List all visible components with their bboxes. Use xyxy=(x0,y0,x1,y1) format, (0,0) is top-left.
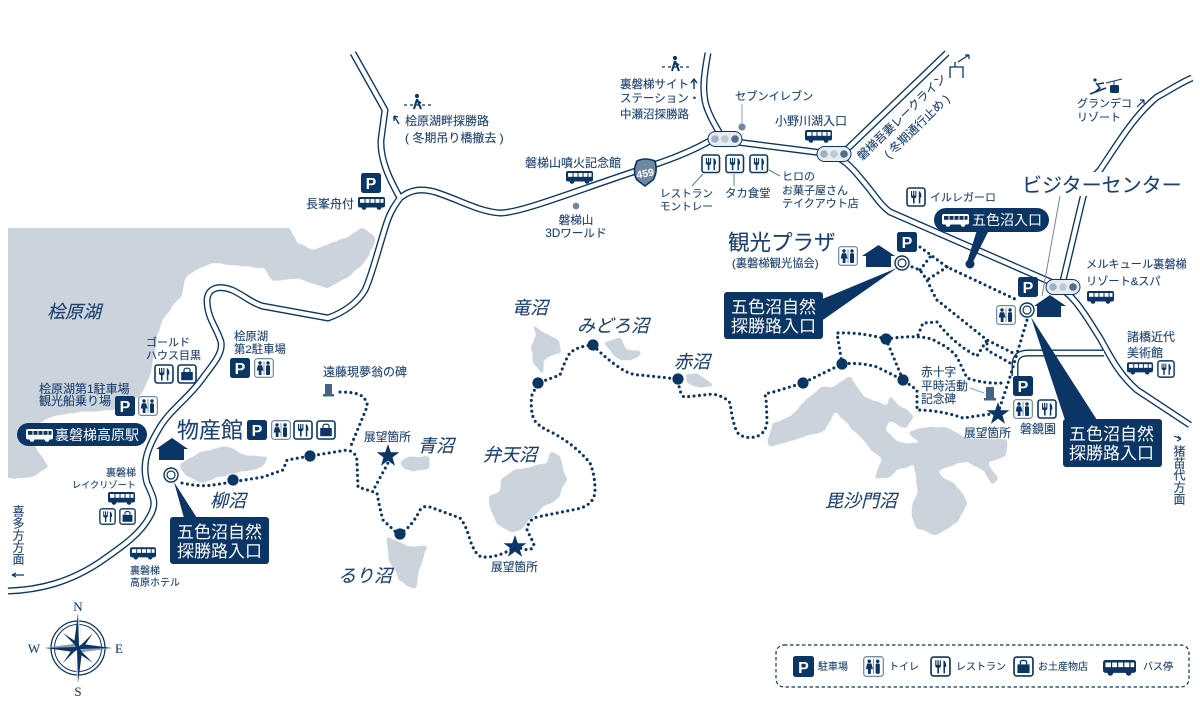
text: 裏磐梯高原ホテル: 裏磐梯 xyxy=(130,566,160,577)
arrow: 喜多方方面 xyxy=(12,573,24,577)
callout: ビジターセンター 五色沼自然探勝路入口 xyxy=(1031,317,1162,467)
text: 冬期通行止め: ( 冬期通行止め ) xyxy=(881,92,952,161)
viewpoint star: 弁天沼 xyxy=(504,535,526,557)
parking: 磐鏡園: P xyxy=(1018,379,1029,396)
compass rose: W xyxy=(28,641,41,656)
text: 裏磐梯レイクリゾート: レイクリゾート xyxy=(72,480,136,490)
title: ビジターセンター: ビジターセンター xyxy=(1022,174,1182,197)
arrow: グランデコ xyxy=(1137,100,1144,107)
icon: observation xyxy=(950,55,969,78)
restaurant: 磐鏡園 xyxy=(1038,400,1056,418)
poi dot: 磐梯山3Dワールド xyxy=(573,203,579,209)
lake: 弁天沼 xyxy=(489,451,567,533)
text: 裏磐梯高原ホテル: 高原ホテル xyxy=(130,576,180,589)
trail entrance: ビジターセンター xyxy=(1020,303,1034,317)
legend text: トイレ: トイレ xyxy=(889,662,919,673)
text: 磐鏡園: 磐鏡園 xyxy=(1020,422,1056,436)
viewpoint star: 毘沙門沼 xyxy=(987,402,1009,424)
bus: レイクリゾート xyxy=(108,492,135,505)
text: 磐梯山3Dワールド: 磐梯山 xyxy=(559,214,593,227)
compass rose xyxy=(28,599,123,699)
parking: 長峯舟付: P xyxy=(366,176,377,193)
text: 磐梯山3Dワールド: 3Dワールド xyxy=(545,227,607,240)
text: 展望箇所 弁天沼: 展望箇所 xyxy=(491,560,538,574)
lake: 竜沼 xyxy=(531,322,561,375)
lake: 赤沼 xyxy=(686,374,715,388)
bus: 小野川湖入口 xyxy=(805,130,832,143)
text: グランデコリゾート: リゾート xyxy=(1077,111,1121,124)
lake: 桧原湖 xyxy=(0,215,376,478)
dotted walking trails xyxy=(182,247,1027,557)
parking: ビジターセンター: P xyxy=(1023,280,1034,297)
bus: 長峯舟付 xyxy=(358,197,385,210)
label: 青沼: 青沼 xyxy=(418,436,457,456)
restaurant: モントレー xyxy=(702,155,720,173)
compass rose: N xyxy=(73,599,83,614)
callout: 観光プラザ 五色沼自然探勝路入口: 探勝路入口 xyxy=(731,317,816,336)
pill: 裏磐梯高原駅 xyxy=(17,423,147,446)
text: ゴールドハウス目黒: ゴールド xyxy=(146,337,190,349)
mask: straight map edges of 桧原湖 xyxy=(0,0,290,600)
text: メルキュール裏磐梯: リゾート&スパ xyxy=(1086,275,1161,288)
building: 物産館 xyxy=(156,438,188,460)
legend: bus xyxy=(1103,660,1136,676)
arrow: up xyxy=(691,79,697,89)
text: 赤十字平時活動記念碑: 記念碑 xyxy=(921,393,956,406)
title: 物産館: 物産館 xyxy=(177,418,243,443)
signal: east xyxy=(1046,280,1080,294)
text: 桧原湖畔探勝路: ( 冬期吊り橋撤去 ) xyxy=(405,130,504,145)
label: 竜沼: 竜沼 xyxy=(512,298,551,318)
arrow: 猪苗代方面 xyxy=(1174,436,1181,441)
bus: 諸橋近代美術館 xyxy=(1127,362,1153,375)
parking: 観光プラザ xyxy=(897,232,917,252)
text: 裏磐梯レイクリゾート: 裏磐梯 xyxy=(106,468,136,479)
text: 猪苗代方面: 猪苗代方面 xyxy=(1172,445,1186,505)
bus: メルキュール xyxy=(1087,291,1114,304)
text: 長峯舟付: 長峯舟付 xyxy=(306,197,354,211)
legend: parking: P xyxy=(798,660,809,677)
label: るり沼: るり沼 xyxy=(338,566,395,586)
toilet: 第2駐車場 xyxy=(255,359,273,377)
toilet: 物産館 xyxy=(272,421,290,439)
toilet: 磐鏡園 xyxy=(1014,400,1032,418)
text: 小野川湖入口: 小野川湖入口 xyxy=(775,113,847,128)
text: タカ食堂: タカ食堂 xyxy=(725,187,771,200)
restaurant: ヒロのお菓子屋さん xyxy=(750,155,768,173)
text: 裏磐梯サイトステーション: ステーション・ xyxy=(620,93,700,105)
text: 展望箇所 毘沙門沼: 展望箇所 xyxy=(964,426,1011,440)
legend text: レストラン: レストラン xyxy=(956,661,1006,673)
bus: 噴火記念館 xyxy=(566,171,593,184)
walker icon: 桧原湖畔探勝路 xyxy=(404,94,431,109)
lake: 毘沙門沼 xyxy=(767,376,1008,536)
legend text: バス停: バス停 xyxy=(1143,660,1173,673)
trail entrance: 観光プラザ xyxy=(895,256,909,270)
restaurant: 物産館 xyxy=(294,421,312,439)
parking: 磐鏡園 xyxy=(1013,376,1033,396)
text: 諸橋近代美術館: 諸橋近代 xyxy=(1127,330,1175,344)
text: 磐梯山噴火記念館: 磐梯山噴火記念館 xyxy=(525,156,621,170)
text: グランデコリゾート: グランデコ xyxy=(1077,98,1132,110)
legend panel xyxy=(776,645,1189,687)
legend text: お土産物店: お土産物店 xyxy=(1038,660,1088,673)
text: 遠藤現夢翁の碑: 遠藤現夢翁の碑 xyxy=(323,364,407,379)
lakes xyxy=(0,215,1008,590)
text: レストランモントレー: レストラン xyxy=(660,188,713,200)
text: 赤十字平時活動記念碑: 赤十字 xyxy=(921,366,956,379)
callout: 物産館 五色沼自然探勝路入口: 五色沼自然 xyxy=(177,523,262,542)
text: メルキュール裏磐梯: メルキュール裏磐梯 xyxy=(1086,259,1187,271)
text: 桧原湖第2駐車場: 桧原湖 xyxy=(234,331,268,343)
restaurant: ゴールドハウス xyxy=(155,365,173,383)
road network xyxy=(8,53,1192,591)
bus: 高原ホテル xyxy=(130,547,156,560)
trail entrance: 物産館 xyxy=(164,468,178,482)
text: ヒロのお菓子屋さん: お菓子屋さん xyxy=(782,184,848,197)
shop: ゴールドハウス xyxy=(178,365,196,383)
parking: 物産館 xyxy=(247,420,267,440)
building: 観光プラザ xyxy=(862,245,895,267)
text: 喜多方方面: 喜多方方面 xyxy=(11,505,25,565)
walker icon: 中瀬沼探勝路 xyxy=(662,56,689,71)
callout: 五色沼入口: 五色沼入口 xyxy=(972,212,1042,228)
leader line: ビジターセンター xyxy=(1042,196,1060,296)
parking: 第2駐車場: P xyxy=(235,361,246,378)
text: 磐梯吾妻レークライン: 磐梯吾妻レークライン xyxy=(854,71,949,163)
parking: 観光プラザ: P xyxy=(902,235,913,252)
text: セブンイレブン: セブンイレブン xyxy=(735,89,813,103)
text: レストランモントレー: モントレー xyxy=(660,201,713,213)
title: 観光プラザ: 観光プラザ xyxy=(728,231,836,255)
callout: 物産館 五色沼自然探勝路入口 xyxy=(170,482,269,564)
trail markers xyxy=(227,260,974,540)
text: 諸橋近代美術館: 美術館 xyxy=(1127,345,1163,360)
text: ヒロのお菓子屋さん: テイクアウト店 xyxy=(782,197,859,210)
icon: ski and gondola xyxy=(1090,78,1122,94)
legend: toilet xyxy=(864,657,883,676)
label: 柳沼: 柳沼 xyxy=(210,491,249,511)
callout: 観光プラザ 五色沼自然探勝路入口 xyxy=(724,268,897,339)
text: 赤十字平時活動記念碑: 平時活動 xyxy=(921,379,968,393)
lake: 柳沼 xyxy=(179,446,268,483)
legend: shop xyxy=(1014,657,1033,676)
lake: みどろ沼 xyxy=(604,338,642,361)
text: 桧原湖畔探勝路: 桧原湖畔探勝路 xyxy=(405,114,489,128)
text: 桧原湖第1駐車場: 桧原湖第1駐車場 xyxy=(39,382,130,396)
route shield 459 xyxy=(634,159,656,186)
monument: 遠藤現夢翁 xyxy=(323,384,334,396)
callout: ビジターセンター 五色沼自然探勝路入口: 五色沼自然 xyxy=(1069,425,1154,444)
viewpoint star: 青沼 xyxy=(377,444,399,466)
legend: parking xyxy=(793,656,814,677)
arrow: 桧原湖畔探勝路 xyxy=(394,116,399,124)
text: ヒロのお菓子屋さん: ヒロの xyxy=(782,171,815,183)
signal: center xyxy=(817,146,851,162)
toilet: 第1駐車場 xyxy=(139,397,157,415)
compass rose: E xyxy=(115,641,123,656)
label: 赤沼: 赤沼 xyxy=(674,352,713,372)
parking: 第1駐車場: P xyxy=(120,399,131,416)
text: 裏磐梯観光協会: (裏磐梯観光協会) xyxy=(732,256,819,270)
lake: るり沼 xyxy=(386,536,428,590)
restaurant: イルレガーロ xyxy=(907,188,925,206)
legend text: 駐車場: 駐車場 xyxy=(818,660,848,673)
label: 毘沙門沼: 毘沙門沼 xyxy=(825,491,900,511)
label: みどろ沼: みどろ沼 xyxy=(577,316,652,336)
shop: レイクリゾート xyxy=(120,509,135,524)
text: ゴールドハウス目黒: ハウス目黒 xyxy=(146,349,201,362)
text: 裏磐梯サイトステーション: 裏磐梯サイト xyxy=(620,79,689,91)
building: ビジターセンター xyxy=(1034,295,1066,317)
label: 桧原湖: 桧原湖 xyxy=(47,302,104,322)
monument: 赤十字 xyxy=(970,387,996,400)
parking: 第2駐車場 xyxy=(230,358,250,378)
text: 展望箇所 青沼: 展望箇所 xyxy=(364,430,411,444)
restaurant: 諸橋近代美術館 xyxy=(1158,361,1174,377)
text: 桧原湖第1駐車場: 観光船乗り場 xyxy=(39,394,111,408)
signal: west xyxy=(708,132,742,146)
callout: 五色沼入口 xyxy=(934,208,1049,264)
compass rose: S xyxy=(74,684,82,699)
legend: restaurant xyxy=(931,657,950,676)
parking: 長峯舟付 xyxy=(361,173,381,193)
restaurant: レイクリゾート xyxy=(100,509,115,524)
callout: 物産館 五色沼自然探勝路入口: 探勝路入口 xyxy=(177,542,262,561)
route shield 459: 459 xyxy=(635,167,655,181)
text: イルレガーロ: イルレガーロ xyxy=(930,191,996,204)
poi dot: セブンイレブン xyxy=(738,104,746,131)
shop: 物産館 xyxy=(317,421,335,439)
callout: ビジターセンター 五色沼自然探勝路入口: 探勝路入口 xyxy=(1069,444,1154,463)
leader lines xyxy=(692,170,780,186)
restaurant: タカ食堂 xyxy=(726,155,744,173)
text: 桧原湖第2駐車場: 第2駐車場 xyxy=(234,342,286,356)
toilet: 観光プラザ xyxy=(839,247,857,265)
pill: 裏磐梯高原駅: 裏磐梯高原駅 xyxy=(55,427,139,443)
lake: 青沼 xyxy=(399,456,429,472)
toilet: ビジターセンター xyxy=(997,306,1015,324)
label: 弁天沼: 弁天沼 xyxy=(483,445,540,465)
text: 裏磐梯サイトステーション: 中瀬沼探勝路 xyxy=(620,107,689,121)
callout: 観光プラザ 五色沼自然探勝路入口: 五色沼自然 xyxy=(731,298,816,317)
parking: 第1駐車場 xyxy=(115,396,135,416)
parking: 物産館: P xyxy=(252,423,263,440)
parking: ビジターセンター xyxy=(1018,277,1038,297)
